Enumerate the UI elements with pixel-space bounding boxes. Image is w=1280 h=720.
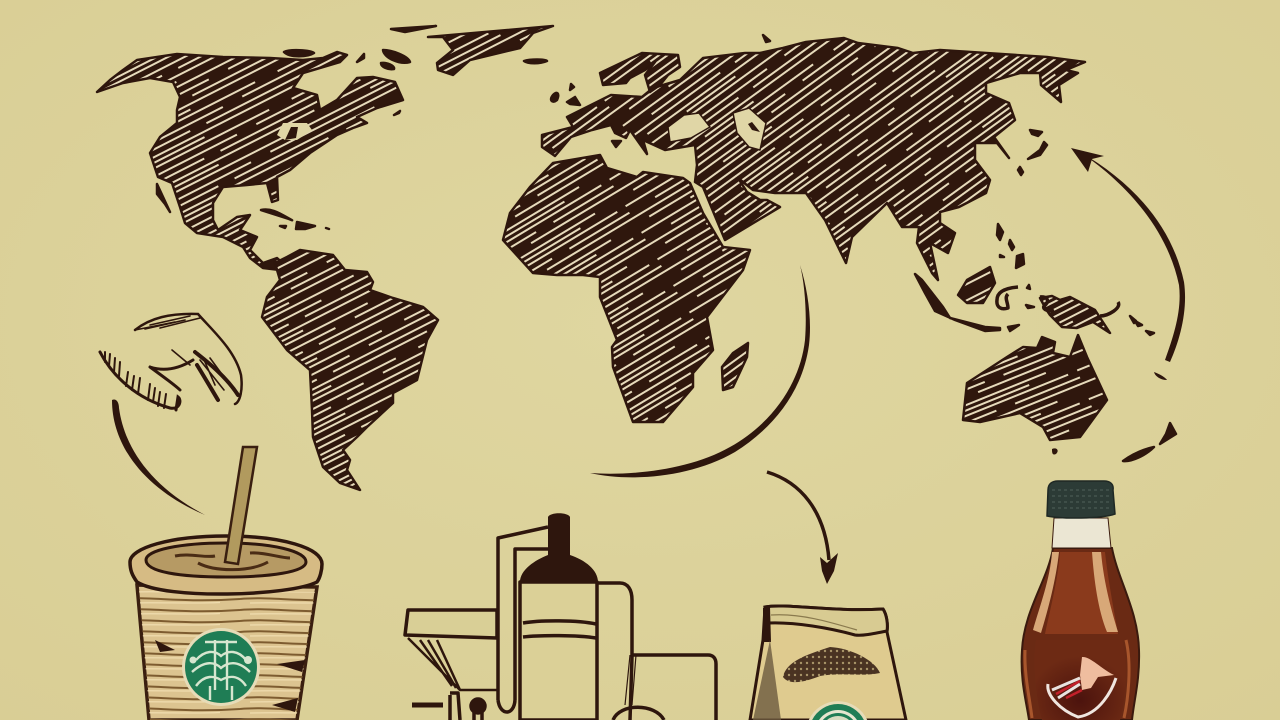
- hopper: [405, 610, 497, 638]
- beans illustration: [783, 647, 880, 682]
- continent: South America: [262, 250, 438, 490]
- arrow: curve to coffee bag: [767, 472, 838, 584]
- islands: New Zealand: [1123, 423, 1176, 461]
- continent: North and Central America: [97, 52, 403, 270]
- arrow: long arc from Africa to coffee machine: [590, 265, 810, 477]
- continent: Australia: [963, 335, 1107, 440]
- handle and valve: [412, 702, 443, 708]
- icon: espresso machine: [405, 513, 716, 720]
- icon: hand dropping beans: [100, 314, 242, 410]
- cup body: [137, 585, 317, 720]
- arrow: curved arrow toward Asia: [1071, 148, 1185, 362]
- continent: Eurasia: [542, 38, 1085, 280]
- pipes: [498, 527, 548, 712]
- bag logo: [809, 701, 867, 720]
- tall body with dark top: [520, 582, 597, 720]
- island: Madagascar: [722, 343, 748, 390]
- islands near Europe and Asia: [551, 35, 1047, 175]
- label graphic: [1048, 678, 1116, 717]
- white neck: [1052, 518, 1111, 548]
- right-hand housing: [598, 583, 716, 720]
- bottle glass and liquid: [1022, 548, 1139, 720]
- icon: cola bottle: [1022, 481, 1139, 720]
- Southeast Asian islands: [915, 224, 1167, 455]
- icon: takeaway coffee cup: [130, 447, 322, 720]
- Arctic islands and Greenland: [261, 26, 553, 229]
- straw: [225, 447, 257, 564]
- icon: coffee bag: [750, 606, 906, 720]
- arrow: curve from hand to cup: [112, 399, 205, 515]
- continent: Africa: [503, 155, 750, 422]
- world map: [97, 26, 1176, 490]
- green logo: [182, 628, 260, 706]
- cup lid: [130, 536, 322, 594]
- dark cap: [1047, 481, 1115, 518]
